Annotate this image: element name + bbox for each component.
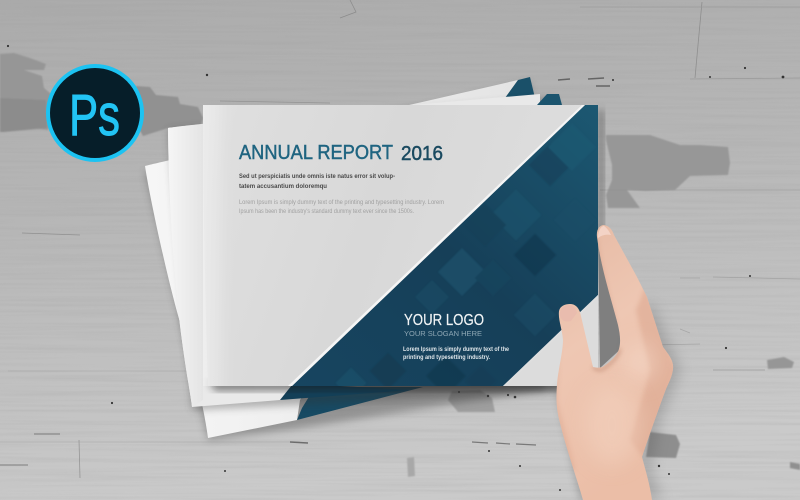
cover page xyxy=(203,105,598,386)
heading: annual report 2016: 2016 xyxy=(401,143,443,165)
thumb nail xyxy=(560,305,577,321)
logo block: printing and typesetting industry. xyxy=(403,354,490,361)
photoshop badge xyxy=(48,66,142,160)
body text: Ipsum has been the industry's standard dummy text ever since the 1500s. xyxy=(239,209,414,215)
booklet: bottom of stack xyxy=(145,77,545,440)
subheading text: tatem accusantium doloremqu xyxy=(239,183,327,190)
logo block: Lorem Ipsum is simply dummy text of the xyxy=(403,346,509,353)
subheading text xyxy=(239,173,395,190)
logo block: YOUR SLOGAN HERE xyxy=(404,329,482,338)
subheading text: Sed ut perspiciatis unde omnis iste natus error sit volup- xyxy=(239,173,395,180)
diagonal teal band xyxy=(292,105,598,399)
body text: Lorem Ipsum is simply dummy text of the printing and typesetting industry. Lorem xyxy=(239,200,444,206)
logo block xyxy=(403,312,509,361)
hand holding booklet xyxy=(553,225,680,500)
photoshop badge: Ps xyxy=(69,83,120,148)
booklet: middle of stack xyxy=(168,94,562,410)
body text xyxy=(239,200,444,215)
white edge of band xyxy=(288,105,585,386)
logo block: YOUR LOGO xyxy=(404,312,484,329)
index nail xyxy=(598,226,611,238)
booklet: top cover xyxy=(203,105,604,399)
lower light corner xyxy=(506,298,598,386)
heading: annual report 2016: ANNUAL REPORT xyxy=(239,142,393,164)
diamond pattern xyxy=(338,148,567,386)
